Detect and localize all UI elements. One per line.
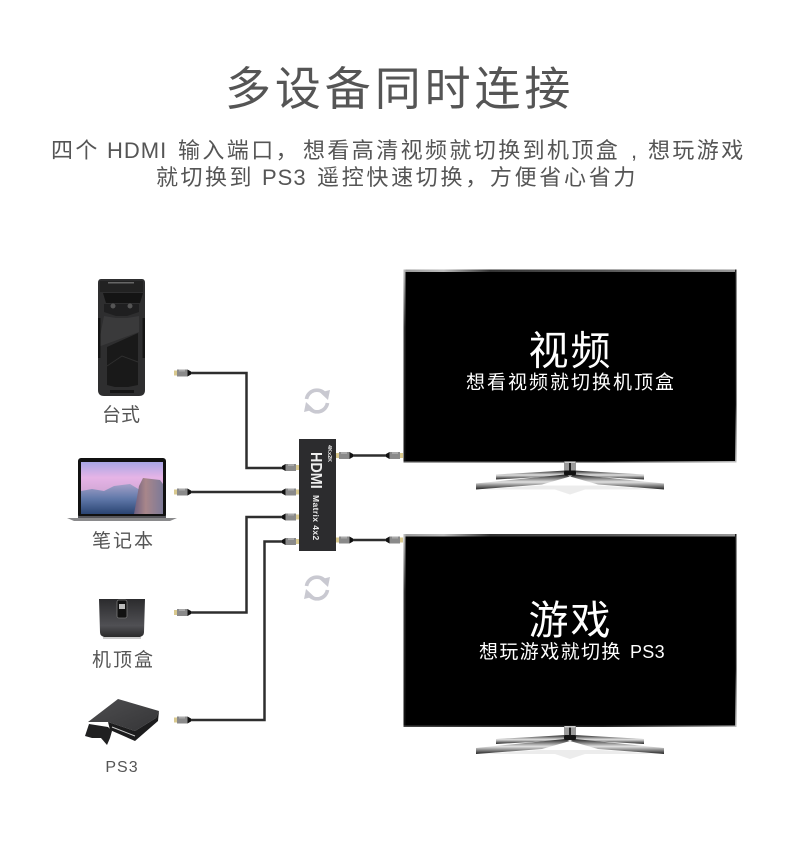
TV screen text: games: 游戏	[528, 599, 612, 643]
subtitle text	[51, 138, 746, 190]
label: desktop: 台式	[102, 404, 140, 426]
icon: sync bottom	[304, 577, 330, 599]
HDMI matrix switch	[299, 439, 336, 551]
switch label: 4Kx2K	[326, 445, 332, 462]
subtitle text: 想看高清视频就切换到机顶盒	[303, 138, 620, 163]
label: PS3: PS3	[105, 759, 139, 776]
switch label: Matrix 4x2	[311, 495, 321, 541]
subtitle text: ,	[631, 138, 640, 163]
subtitle text: PS3	[262, 165, 307, 190]
subtitle text: 四个	[51, 138, 100, 163]
subtitle text: 就切换到	[156, 165, 254, 190]
TV screen text: games: 想玩游戏就切换	[479, 641, 622, 663]
icon: sync top	[304, 390, 330, 412]
icon: laptop	[67, 458, 177, 521]
TV stand bottom	[476, 726, 664, 759]
TV bottom	[404, 534, 736, 727]
cables	[190, 373, 390, 720]
subtitle text: 想玩游戏	[648, 138, 746, 163]
subtitle text: 遥控快速切换，方便省心省力	[317, 165, 638, 190]
connectors	[174, 370, 403, 724]
subtitle text: HDMI	[107, 138, 167, 163]
label: laptop: 笔记本	[92, 530, 155, 552]
TV screen text: games: PS3	[630, 642, 665, 662]
switch label	[307, 445, 332, 541]
TV screen text: video: 视频	[528, 330, 612, 374]
label: set-top box: 机顶盒	[92, 649, 155, 671]
TV screen text: games	[479, 599, 665, 663]
TV top	[404, 270, 736, 462]
subtitle text: 输入端口，	[178, 138, 300, 163]
switch label: HDMI	[307, 452, 325, 489]
TV screen text: video: 想看视频就切换机顶盒	[466, 372, 676, 394]
title: 多设备同时连接	[225, 63, 574, 115]
icon: set-top box	[99, 599, 145, 639]
TV screen text: video	[466, 330, 676, 394]
icon: desktop tower	[98, 279, 145, 396]
TV stand top	[476, 462, 664, 494]
icon: PS3 console	[85, 699, 159, 745]
